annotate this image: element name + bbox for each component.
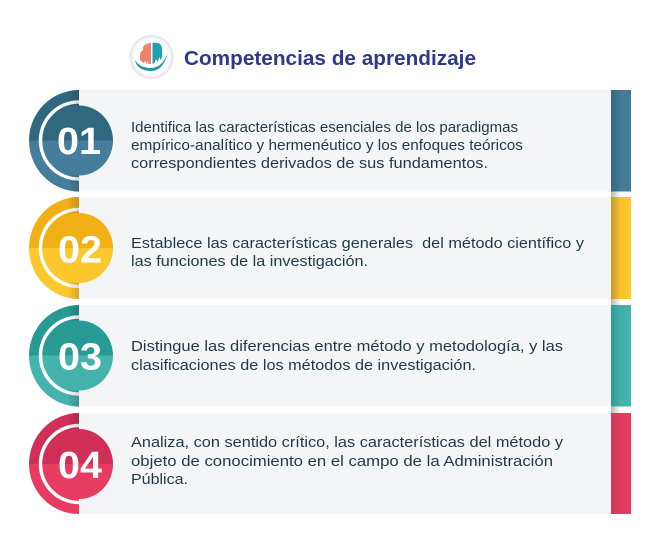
description text: correspondientes derivados de sus fundamentos. [131,155,488,172]
card background [79,197,611,299]
right accent bar [611,197,631,299]
panel: competencia 01 [29,90,631,192]
description text: empírico-analítico y hermenéutico y los enfoques teóricos [131,137,523,154]
number badge [29,90,118,192]
description text: Pública. [131,471,188,488]
panel: competencia 03 [29,305,631,407]
number badge [29,413,118,514]
description text: Distingue las diferencias entre método y metodología, y las [131,338,563,355]
right accent bar [611,305,631,406]
description text [131,235,585,270]
card background [79,305,611,406]
description text: Identifica las características esenciales de los paradigmas [131,119,518,136]
right accent bar [611,90,631,192]
number badge: 01 [57,121,101,163]
number badge [29,305,118,407]
title: Competencias de aprendizaje [184,48,476,70]
panel: competencia 02 [29,197,631,299]
number badge [29,197,118,299]
description text: clasificaciones de los métodos de investigación. [131,357,476,374]
description text [131,119,523,172]
number badge: 02 [58,230,102,272]
number badge: 04 [58,445,102,487]
description text [131,434,564,488]
card background [79,413,611,514]
number badge: 03 [58,336,102,378]
description text: las funciones de la investigación. [131,253,368,270]
header [130,36,476,78]
description text: objeto de conocimiento en el campo de la Administración [131,453,553,470]
description text: Analiza, con sentido crítico, las características del método y [131,434,564,451]
right accent bar [611,413,631,514]
card background [79,90,611,192]
icon: hand logo badge [130,36,173,78]
description text [131,338,563,374]
panel: competencia 04 [29,413,631,514]
description text: Establece las características generales del método científico y [131,235,585,252]
